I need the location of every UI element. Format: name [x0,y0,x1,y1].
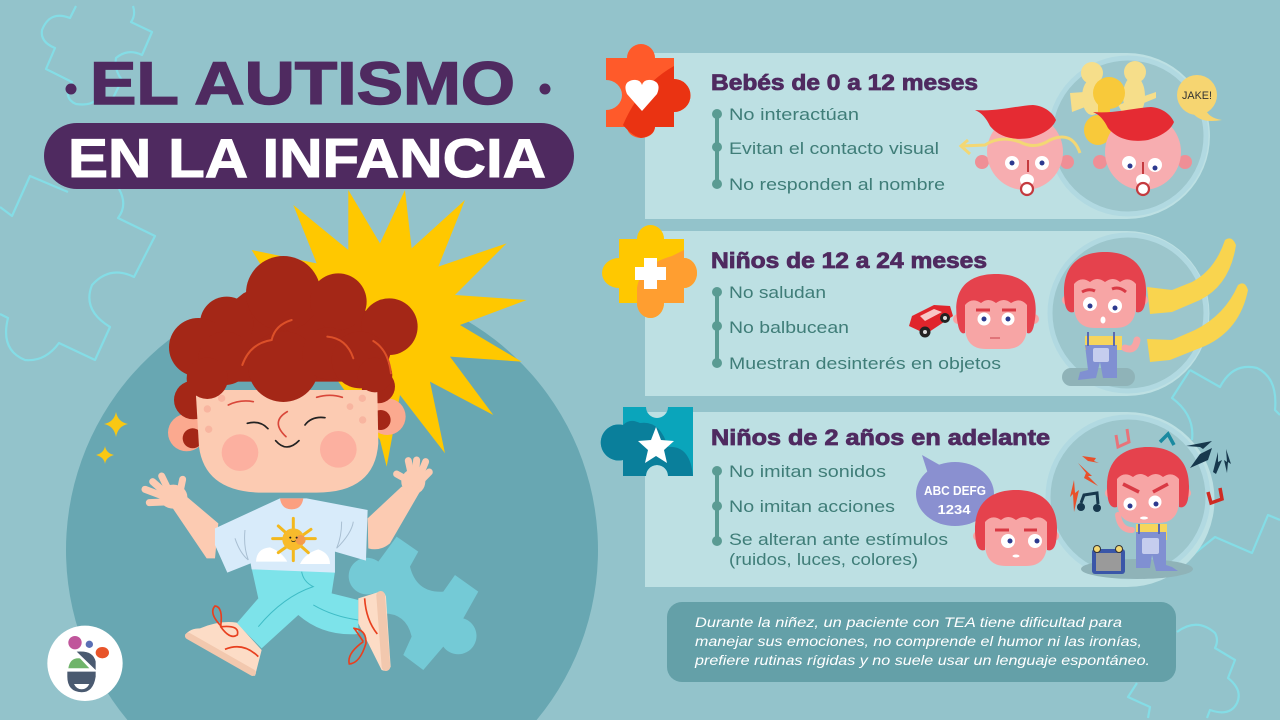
speech bubble: letters and numbers: ABC DEFG [924,483,986,498]
list timeline [712,109,722,189]
yellow baby silhouettes [1070,61,1156,145]
shirt clouds [256,547,330,564]
speech bubble: letters and numbers [916,455,994,526]
circle backdrop [1050,58,1206,214]
callout note [667,602,1176,682]
puzzle icon: heart [606,44,691,138]
sunburst [252,190,527,467]
ears [168,414,205,451]
child face: looks away [953,274,1039,349]
list timeline [712,466,722,546]
callout note: prefiere rutinas rígidas y no suele usar un lenguaje espontáneo. [694,653,1150,668]
speech bubble: letters and numbers: 1234 [938,502,971,517]
face [196,390,378,493]
freckles [204,395,366,433]
list items: No responden al nombre [729,175,945,194]
sparkles [96,412,128,464]
child head [168,256,418,493]
list items: No balbucean [729,318,849,337]
panel: children 2 years and up [601,407,1231,587]
list items: Se alteran ante estímulos [729,530,948,549]
list items: Evitan el contacto visual [729,139,939,158]
heading: Niños de 12 a 24 meses [711,248,987,273]
title pill: EN LA INFANCIA [68,127,546,189]
light blue puzzle piece [349,537,478,670]
shirt [215,498,368,573]
baby two [1093,107,1192,195]
circle backdrop [1050,235,1206,391]
yellow pointing hands [1147,238,1248,362]
back hair [174,370,395,448]
upset child [1105,447,1191,571]
list items: (ruidos, luces, colores) [729,550,918,569]
panel: babies 0 to 12 months [606,44,1222,219]
list items [729,105,945,194]
music notes and sound bolts [1070,429,1231,512]
arms [145,460,429,558]
list items [729,462,948,569]
list items: No imitan sonidos [729,462,886,481]
curly hair [169,256,418,402]
standing child [1062,252,1148,380]
right shoe [349,592,391,671]
heading: Niños de 2 años en adelante [711,425,1050,450]
speech bubble: JAKE: JAKE! [1182,90,1212,102]
logo [47,626,123,701]
title [44,50,574,189]
list timeline [712,287,722,368]
child body [145,460,429,676]
list items: No imitan acciones [729,497,895,516]
cheeks [222,434,258,471]
toy car [909,305,953,338]
neck [280,498,303,509]
title line one: EL AUTISMO [90,50,515,117]
trousers [237,568,358,648]
ground shadow [1081,559,1193,579]
callout note: manejar sus emociones, no comprende el humor ni las ironías, [695,634,1142,649]
left shoe [185,606,262,676]
child face: repeats [973,490,1059,566]
callout note: Durante la niñez, un paciente con TEA tiene dificultad para [695,615,1123,630]
list items [729,283,1001,373]
large teal circle [66,284,598,720]
heading: Bebés de 0 a 12 meses [711,70,978,95]
facial features [228,395,342,447]
ground shadow [1062,368,1135,386]
baby one [961,105,1080,195]
puzzle icon: plus [602,225,697,318]
list items: Muestran desinterés en objetos [729,354,1001,373]
list items: No interactúan [729,105,859,124]
radio [1092,546,1125,574]
list items: No saludan [729,283,826,302]
speech bubble: JAKE [1177,75,1222,121]
circle backdrop [1048,417,1208,577]
panel: children 12 to 24 months [602,225,1248,396]
shirt sun [273,518,315,561]
puzzle icon: star [601,407,693,476]
